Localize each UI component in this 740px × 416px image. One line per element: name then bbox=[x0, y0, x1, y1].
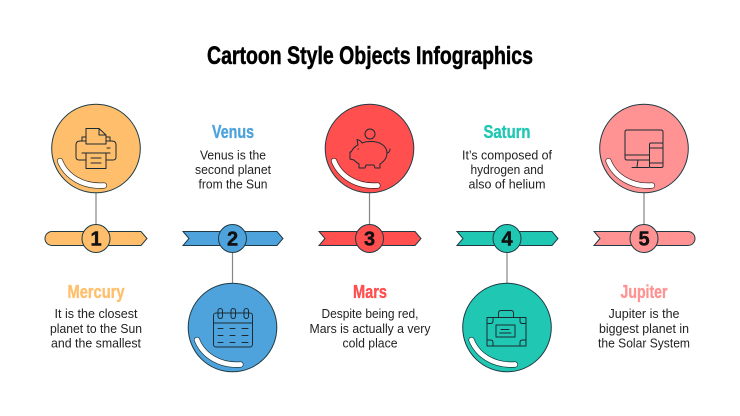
ribbon 3 bbox=[319, 232, 421, 246]
text: Mercury description: and the smallest bbox=[51, 336, 141, 350]
ribbon 5 bbox=[594, 232, 695, 246]
text: Venus description: second planet bbox=[195, 162, 271, 177]
number 2 bbox=[218, 224, 246, 252]
ribbon 2 bbox=[183, 232, 283, 246]
connector 5 bbox=[643, 192, 645, 225]
step 1: Mercury bbox=[45, 104, 147, 350]
circle 1 bbox=[52, 104, 140, 193]
icon: monitor and phone bbox=[625, 130, 663, 168]
icon: suitcase bbox=[487, 310, 526, 346]
label: Mercury: Mercury bbox=[68, 282, 124, 302]
step 3: Mars bbox=[310, 104, 431, 350]
text: Saturn description: It’s composed of bbox=[462, 148, 552, 162]
number 4: 4 bbox=[501, 228, 513, 250]
icon: piggy bank bbox=[350, 129, 390, 168]
label: Venus: Venus bbox=[212, 122, 254, 142]
number 5 bbox=[630, 224, 658, 252]
step 5: Jupiter bbox=[594, 104, 695, 350]
connector 1 bbox=[95, 192, 97, 225]
circle 2 bbox=[188, 283, 277, 372]
text: Jupiter description: Jupiter is the bbox=[608, 306, 680, 321]
number 3 bbox=[356, 224, 384, 252]
highlight 4 bbox=[472, 340, 515, 365]
label: Jupiter: Jupiter bbox=[620, 282, 668, 302]
text: Mercury description: It is the closest bbox=[54, 306, 138, 321]
label: Mars: Mars bbox=[353, 282, 387, 302]
connector 2 bbox=[232, 252, 234, 284]
ribbon 1 bbox=[45, 232, 147, 246]
highlight 1 bbox=[60, 161, 104, 186]
connector 4 bbox=[506, 252, 508, 284]
text: Saturn description bbox=[462, 148, 552, 192]
text: Mars description: cold place bbox=[342, 336, 398, 350]
text: Mercury description: planet to the Sun bbox=[50, 321, 142, 336]
text: Jupiter description: biggest planet in bbox=[599, 321, 689, 336]
title: Cartoon Style Objects Infographics bbox=[207, 42, 533, 70]
text: Jupiter description bbox=[598, 306, 690, 350]
text: Saturn description: hydrogen and bbox=[470, 162, 544, 177]
circle 5 bbox=[600, 104, 688, 193]
icon: calendar bbox=[214, 308, 252, 347]
text: Jupiter description: the Solar System bbox=[598, 336, 690, 350]
number 1 bbox=[82, 224, 110, 252]
text: Venus description: Venus is the bbox=[200, 148, 266, 162]
label: Saturn: Saturn bbox=[484, 122, 530, 142]
text: Mars description: Mars is actually a very bbox=[310, 321, 431, 336]
number 1: 1 bbox=[90, 228, 102, 250]
highlight 2 bbox=[197, 340, 240, 365]
text: Mars description bbox=[310, 306, 431, 350]
highlight 3 bbox=[334, 161, 378, 186]
text: Mercury description bbox=[50, 306, 142, 350]
circle 3 bbox=[325, 104, 414, 193]
number 3: 3 bbox=[364, 228, 375, 250]
number 4 bbox=[493, 224, 521, 252]
number 5: 5 bbox=[638, 228, 650, 250]
text: Mars description: Despite being red, bbox=[322, 306, 418, 321]
connector 3 bbox=[368, 192, 370, 225]
circle 4 bbox=[463, 283, 551, 372]
step 4: Saturn bbox=[457, 122, 558, 372]
text: Venus description bbox=[195, 148, 271, 192]
ribbon 4 bbox=[457, 232, 558, 246]
highlight 5 bbox=[608, 161, 652, 186]
number 2: 2 bbox=[227, 228, 238, 250]
text: Venus description: from the Sun bbox=[198, 176, 268, 192]
step 2: Venus bbox=[183, 122, 283, 372]
text: Saturn description: also of helium bbox=[468, 176, 546, 192]
icon: printer bbox=[76, 128, 116, 168]
